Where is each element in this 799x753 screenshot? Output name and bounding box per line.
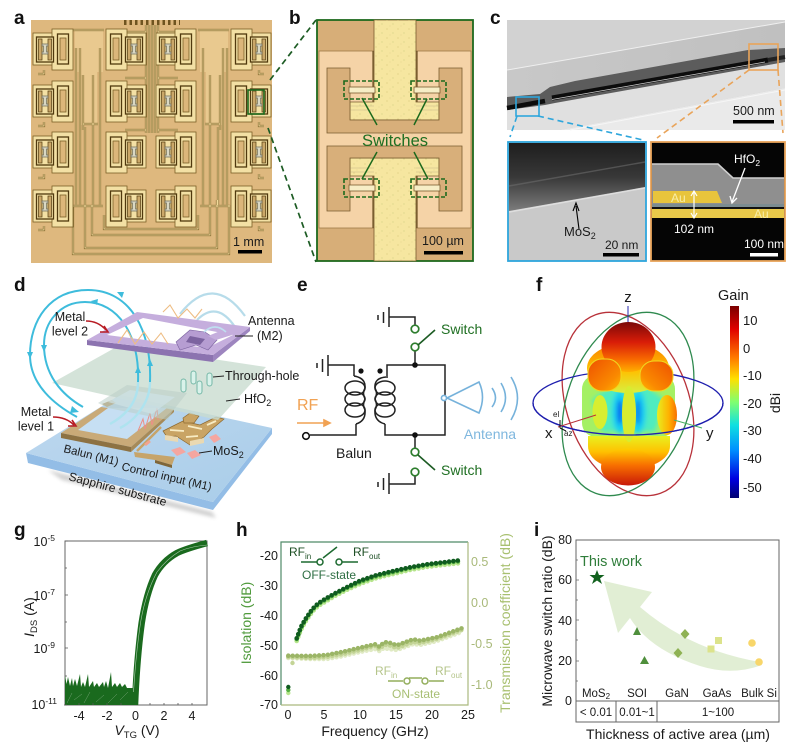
x axis line <box>558 415 596 427</box>
left mid lobe <box>592 395 608 429</box>
transfer curve band <box>134 543 207 705</box>
field swirl on antenna <box>204 327 226 332</box>
bond pads <box>124 20 180 25</box>
y axis title: DS <box>29 620 40 633</box>
thickness labels: 0.01~1 <box>619 707 655 719</box>
x tick labels: -2 <box>101 709 113 723</box>
tick marks <box>64 541 192 705</box>
y tick labels: 60 <box>558 573 572 587</box>
HfO2 label: 2 <box>266 398 271 408</box>
x tick labels <box>73 709 196 723</box>
scale bar 500 nm: 500 nm <box>733 104 775 118</box>
el az labels <box>553 410 572 438</box>
switch contacts <box>411 325 419 476</box>
ON-state switch icon: RF <box>375 664 391 678</box>
panel label c: c <box>490 8 501 29</box>
y tick labels: -11 <box>45 696 57 706</box>
material labels <box>582 688 777 701</box>
panel e: circuit schematic <box>297 275 518 494</box>
switch channels <box>349 87 440 191</box>
HfO2 layer <box>52 345 266 420</box>
colour bar ticks: 0 <box>743 341 750 356</box>
z axis label: z <box>624 289 632 306</box>
y tick labels: 10 <box>34 589 47 603</box>
colour bar ticks: -40 <box>743 451 762 466</box>
bottom lobe <box>601 448 655 486</box>
x axis label: x <box>545 425 553 442</box>
thickness labels <box>580 707 734 719</box>
colour bar ticks: 10 <box>743 313 757 328</box>
antenna label <box>235 314 295 343</box>
dark metal brackets <box>327 68 462 211</box>
x axis ticks: 0 <box>285 708 292 722</box>
orange guide lines <box>657 70 783 138</box>
HfO2 label: HfO <box>734 152 755 166</box>
y axis label: y <box>706 425 714 442</box>
right axis ticks <box>471 555 493 692</box>
orange waves on antenna <box>118 305 202 344</box>
substrate label: Sapphire substrate <box>67 469 168 509</box>
dBi label: dBi <box>767 393 783 413</box>
MoS2 label: 2 <box>591 231 596 241</box>
GaN diamonds <box>674 629 690 658</box>
colour bar ticks: -30 <box>743 423 762 438</box>
substrate shadow <box>48 470 216 518</box>
x tick labels: -4 <box>73 709 85 723</box>
x axis title: Thickness of active area (µm) <box>586 726 770 742</box>
y tick labels: -9 <box>47 640 55 650</box>
thickness labels: < 0.01 <box>580 707 612 719</box>
OFF-state switch icon: OFF-state <box>302 568 356 582</box>
RF input terminal <box>303 433 309 439</box>
magnetic field loops <box>27 290 153 428</box>
panel i: benchmark chart <box>534 520 779 742</box>
panel h: isolation and transmission <box>236 520 513 739</box>
switch labels: Switch <box>441 462 482 478</box>
switches label: Switches <box>362 132 428 150</box>
GaAs squares <box>708 637 722 652</box>
colour bar ticks <box>743 313 762 495</box>
ON-state switch icon <box>375 664 463 701</box>
right mid lobe <box>657 395 677 435</box>
gold switch electrodes <box>163 413 224 446</box>
RF arrow <box>297 420 330 426</box>
thickness double arrow <box>691 191 697 218</box>
switch labels: Switch <box>441 321 482 337</box>
center spindle <box>622 386 636 442</box>
MoS2 label: MoS <box>213 444 239 458</box>
balun coils <box>345 376 395 424</box>
panel b: switch detail <box>289 8 473 261</box>
x axis ticks: 10 <box>353 708 367 722</box>
arrow trend <box>604 581 762 671</box>
bulk Si circles <box>748 639 763 666</box>
balun label: Balun (M1) <box>62 443 120 469</box>
TEM overview image <box>507 20 785 130</box>
gap between rails <box>373 51 417 228</box>
y axis title: I <box>21 633 37 637</box>
colour bar ticks: -20 <box>743 396 762 411</box>
circuit wires <box>310 317 445 484</box>
upper shoulders <box>587 343 669 393</box>
blue guide lines <box>510 116 643 140</box>
OFF-state switch icon: in <box>305 552 311 561</box>
material labels: 2 <box>606 692 611 701</box>
routing wires <box>38 25 264 254</box>
y tick labels <box>558 533 572 708</box>
panel label a: a <box>14 8 25 29</box>
panel label e: e <box>297 275 308 296</box>
plot frame <box>65 541 207 705</box>
left axis ticks: -60 <box>260 669 278 683</box>
x axis title: TG <box>124 730 137 741</box>
x axis ticks: 20 <box>425 708 439 722</box>
x tick labels: 0 <box>132 709 139 723</box>
y axis title: (A) <box>21 597 37 620</box>
SOI triangles <box>633 627 649 664</box>
switch labels <box>441 321 482 478</box>
antenna symbol <box>441 377 518 420</box>
zoom guide lines a to b <box>268 20 316 262</box>
plot frame <box>281 542 468 705</box>
OFF-state switch icon: out <box>369 552 381 561</box>
balun label: Balun <box>336 445 372 461</box>
antenna cell array <box>33 29 271 227</box>
HfO2 arrow <box>730 168 745 203</box>
plot frame <box>576 540 779 722</box>
MoS2 label: 2 <box>239 450 244 460</box>
ON-state series <box>288 628 462 659</box>
sapphire substrate <box>26 395 272 510</box>
chip background <box>31 20 272 263</box>
HfO2 label: 2 <box>755 158 760 168</box>
blue zoom box <box>516 97 539 116</box>
y axis line <box>674 420 702 428</box>
ON-state switch icon: ON-state <box>392 687 440 701</box>
colour bar ticks: -10 <box>743 368 762 383</box>
x axis ticks: 5 <box>321 708 328 722</box>
ground symbols <box>317 307 389 494</box>
right axis ticks: -1.0 <box>471 678 493 692</box>
y tick labels: 20 <box>558 654 572 668</box>
material labels: Bulk Si <box>741 688 777 700</box>
colour bar ticks: -50 <box>743 480 762 495</box>
z axis line <box>627 306 629 322</box>
material labels: SOI <box>627 688 647 700</box>
el az labels: el <box>553 410 559 419</box>
panel label f: f <box>536 275 543 296</box>
zoom highlight box <box>248 90 264 114</box>
peach metal area <box>319 51 471 228</box>
x axis title: Frequency (GHz) <box>321 723 429 739</box>
switch blades <box>418 330 435 470</box>
y tick labels: 40 <box>558 614 572 628</box>
panel label i: i <box>534 520 539 541</box>
scale bar 20 nm: 20 nm <box>605 238 638 252</box>
left axis ticks: -70 <box>260 698 278 712</box>
panel f: 3D radiation pattern <box>533 275 783 514</box>
el az labels: az <box>564 429 572 438</box>
material labels: GaAs <box>703 688 732 700</box>
through-hole label: Through-hole <box>225 369 299 383</box>
scale bar 1 mm: 1 mm <box>233 235 264 249</box>
left axis ticks: -30 <box>260 579 278 593</box>
ON-state switch icon: out <box>451 671 463 680</box>
blurred cyan zones <box>592 383 665 434</box>
panel d: exploded device diagram <box>14 275 299 518</box>
MoS2 label: MoS <box>564 224 591 239</box>
metal level 2 antenna <box>87 312 250 362</box>
x axis title: V <box>114 722 125 738</box>
control input label: Control input (M1) <box>120 461 213 494</box>
scale bar 100 um <box>422 234 464 254</box>
base green body <box>582 375 675 437</box>
OFF-state switch icon <box>289 545 381 582</box>
right side lobe <box>640 361 673 391</box>
x axis ticks <box>285 708 475 722</box>
noise gaps <box>67 692 128 703</box>
front arc of azimuth ring <box>533 403 723 435</box>
top lobe <box>602 322 656 372</box>
OFF-state switch icon: RF <box>353 545 369 559</box>
MoS2 arrow <box>573 203 579 229</box>
metal level 2 label: Metal <box>55 310 85 324</box>
panel label h: h <box>236 520 248 541</box>
right axis ticks: -0.5 <box>471 637 493 651</box>
MoS2 flakes <box>171 434 221 459</box>
y tick labels: 80 <box>558 533 572 547</box>
lower body <box>588 436 670 468</box>
metal level 1 balun <box>61 400 174 452</box>
x tick labels: 2 <box>161 709 168 723</box>
panel a: chip micrograph <box>14 8 272 263</box>
transmission axis title: Transmission coefficient (dB) <box>497 533 513 713</box>
gain blob <box>582 322 677 486</box>
Au labels: Au <box>754 207 769 221</box>
x axis ticks: 15 <box>389 708 403 722</box>
y tick labels: 10 <box>34 642 47 656</box>
ON-state switch icon: RF <box>435 664 451 678</box>
polarity dots <box>358 362 418 438</box>
central yellow signal line <box>350 20 439 261</box>
orange zoom box <box>749 44 778 70</box>
y tick labels: -5 <box>47 533 55 543</box>
window in HfO2 layer <box>98 385 187 420</box>
y tick labels: 10 <box>34 535 47 549</box>
OFF-state series <box>297 560 462 641</box>
panel c: TEM images <box>490 8 785 261</box>
antenna label: Antenna <box>248 314 295 328</box>
Au labels <box>671 191 769 221</box>
dashed switch boxes <box>344 81 446 197</box>
red arrow level 2 <box>86 321 108 332</box>
dome field lines <box>180 293 245 327</box>
OFF-state switch icon: RF <box>289 545 305 559</box>
metal level 2 label: level 2 <box>52 324 88 338</box>
star this work <box>590 570 604 584</box>
x axis title: (V) <box>137 722 160 738</box>
material labels: GaN <box>665 688 689 700</box>
metal level 1 label: level 1 <box>18 420 54 434</box>
azimuth and elevation rings <box>533 294 723 514</box>
left axis ticks <box>260 549 278 712</box>
y axis title: Microwave switch ratio (dB) <box>539 535 555 707</box>
y tick labels: 0 <box>565 694 572 708</box>
MoS2 label <box>199 444 244 460</box>
y tick labels <box>31 533 57 712</box>
y ticks <box>576 560 579 681</box>
antenna label: (M2) <box>257 329 283 343</box>
gain title: Gain <box>718 288 749 304</box>
switch pointer lines <box>362 98 428 179</box>
x tick labels: 4 <box>189 709 196 723</box>
control input traces <box>134 427 175 468</box>
light bus pads <box>75 30 228 125</box>
left side lobe <box>588 359 621 391</box>
noise floor <box>65 672 137 705</box>
scale bar 100 nm: 100 nm <box>744 237 784 251</box>
scale bar 100 um: 100 µm <box>422 234 464 248</box>
colour bar <box>730 306 739 498</box>
material labels: MoS <box>582 688 606 700</box>
blue inset MoS2 <box>508 142 646 261</box>
pink waves on balun <box>138 408 158 431</box>
panel label g: g <box>14 520 26 541</box>
panel label b: b <box>289 8 301 29</box>
102 nm label: 102 nm <box>674 222 714 236</box>
y tick labels: -7 <box>47 587 55 597</box>
red arrow level 1 <box>53 417 76 426</box>
HfO2 label: HfO <box>244 392 266 406</box>
ON-state stray point <box>290 661 295 665</box>
antenna label: Antenna <box>464 426 516 442</box>
right axis ticks: 0.5 <box>471 555 488 569</box>
right axis ticks: 0.0 <box>471 596 488 610</box>
this work label: This work <box>580 554 643 570</box>
x axis ticks: 25 <box>461 708 475 722</box>
left axis ticks: -20 <box>260 549 278 563</box>
left axis ticks: -40 <box>260 609 278 623</box>
HfO2 label <box>226 392 271 408</box>
RF label: RF <box>297 397 319 414</box>
thickness labels: 1~100 <box>702 707 734 719</box>
isolation axis title: Isolation (dB) <box>238 582 254 664</box>
Au labels: Au <box>671 191 686 205</box>
y tick labels: 10 <box>31 698 45 712</box>
OFF-state low frequency points <box>286 685 290 695</box>
panel g: transfer curves <box>14 520 207 741</box>
ON-state switch icon: in <box>391 671 397 680</box>
orange inset cross section <box>651 142 785 261</box>
panel label d: d <box>14 275 26 296</box>
through-holes <box>181 371 212 394</box>
metal level 1 label: Metal <box>21 405 51 419</box>
micrograph frame <box>317 20 473 261</box>
left axis ticks: -50 <box>260 639 278 653</box>
